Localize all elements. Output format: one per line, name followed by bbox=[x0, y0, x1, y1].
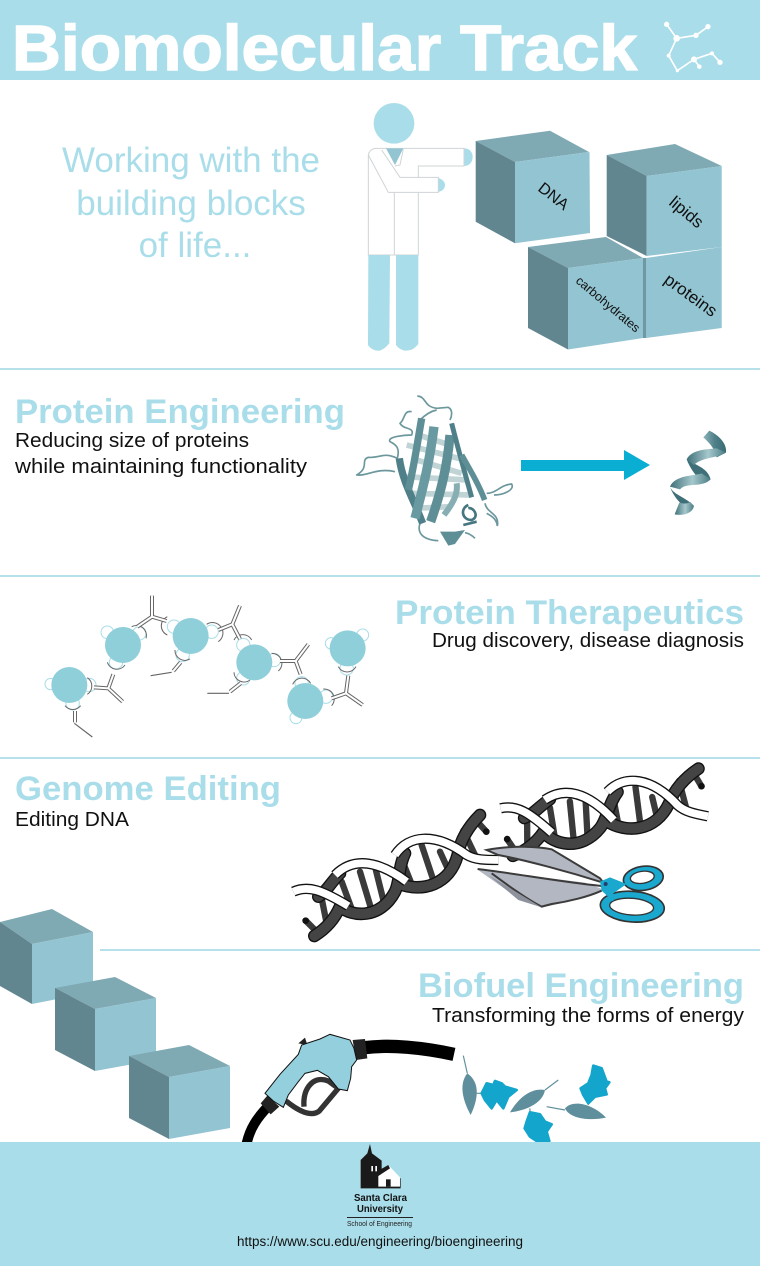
divider bbox=[100, 949, 760, 951]
divider bbox=[0, 757, 760, 759]
cube: proteins: proteins bbox=[661, 270, 721, 321]
cube: top left bbox=[0, 909, 93, 1004]
icon: constellation bbox=[664, 22, 723, 72]
heading: biofuel engineering: Biofuel Engineering bbox=[418, 967, 744, 1005]
intro text: of life... bbox=[139, 226, 251, 265]
heading: protein engineering: Protein Engineering bbox=[15, 393, 345, 431]
divider bbox=[0, 575, 760, 577]
text: biofuel description: Transforming the forms of energy bbox=[432, 1005, 744, 1027]
icon: right DNA helix bbox=[492, 733, 716, 891]
logo: name bbox=[354, 1192, 407, 1215]
text: protein engineering description: Reducing size of proteins bbox=[15, 430, 249, 452]
intro text: Working with the bbox=[62, 141, 320, 180]
text: genome editing description: Editing DNA bbox=[15, 809, 130, 831]
text: protein engineering description: while maintaining functionality bbox=[14, 456, 307, 478]
cube: lipids bbox=[607, 144, 722, 256]
icon: DNA and scissors bbox=[293, 733, 716, 936]
icon: large protein bbox=[357, 396, 512, 546]
heading: protein therapeutics: Protein Therapeutics bbox=[395, 594, 744, 632]
text: protein therapeutics description: Drug discovery, disease diagnosis bbox=[432, 630, 744, 652]
icon: left DNA helix bbox=[293, 815, 498, 936]
divider bbox=[0, 368, 760, 370]
url: https://www.scu.edu/engineering/bioengineering bbox=[237, 1234, 523, 1249]
icon: fuel nozzle bbox=[247, 1034, 454, 1143]
logo: school: School of Engineering bbox=[347, 1219, 412, 1228]
cube: lipids: lipids bbox=[665, 193, 707, 232]
icon: leaves bbox=[462, 1056, 609, 1141]
icon: antibodies bbox=[45, 596, 369, 737]
cube: carbohydrates: carbohydrates bbox=[573, 274, 643, 335]
intro text: building blocks bbox=[76, 184, 306, 223]
heading: genome editing: Genome Editing bbox=[15, 770, 281, 808]
arrow bbox=[521, 450, 650, 480]
icon: scissors bbox=[477, 847, 665, 924]
header band bbox=[0, 0, 760, 84]
intro text bbox=[62, 141, 320, 265]
cube: lower left bbox=[129, 1045, 230, 1139]
cube: DNA bbox=[476, 131, 590, 243]
icon: small helix bbox=[670, 431, 726, 515]
logo: church bbox=[361, 1144, 401, 1188]
footer band bbox=[0, 1142, 760, 1266]
cube: DNA: DNA bbox=[535, 180, 572, 214]
icon: scientist bbox=[368, 103, 473, 351]
cube: middle left bbox=[55, 977, 156, 1071]
cube: proteins bbox=[643, 247, 722, 338]
title: Biomolecular Track bbox=[12, 12, 637, 84]
logo: name: Santa Clara bbox=[354, 1192, 407, 1204]
cube: carbohydrates bbox=[528, 237, 643, 350]
logo: name: University bbox=[357, 1203, 403, 1215]
text: protein engineering description bbox=[14, 430, 307, 478]
